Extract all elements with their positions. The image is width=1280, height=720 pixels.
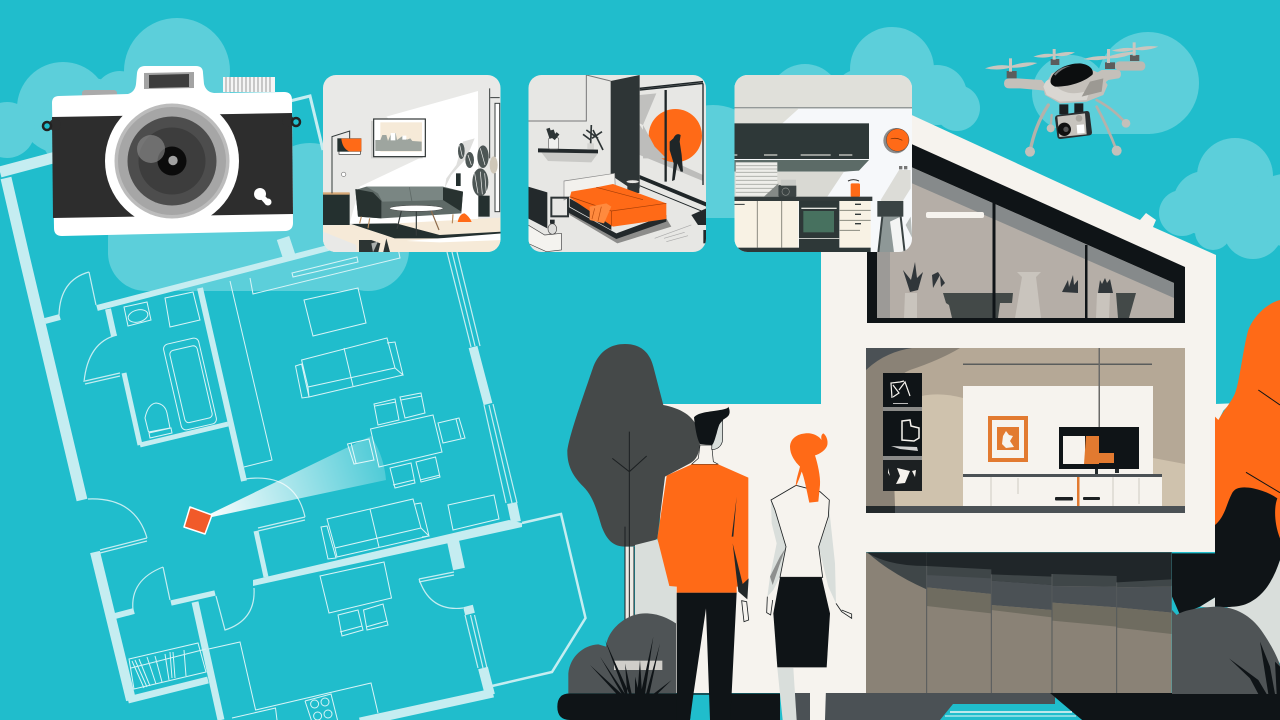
countertop bbox=[734, 197, 872, 201]
nightstands bbox=[551, 180, 639, 216]
tree trunk bbox=[612, 432, 647, 667]
man hand bbox=[742, 601, 749, 622]
floor plan walls bbox=[0, 96, 586, 720]
panel: right trees bbox=[1172, 300, 1280, 694]
tree backdrop bbox=[1200, 560, 1280, 663]
tree: black bbox=[1172, 487, 1280, 615]
house corner notch bbox=[1215, 403, 1231, 421]
stool bbox=[877, 201, 912, 252]
window frame bbox=[490, 88, 500, 158]
headboard bbox=[564, 173, 615, 200]
orange lamp bbox=[458, 213, 472, 222]
person: woman bbox=[767, 433, 852, 720]
ground bbox=[795, 693, 1280, 720]
floor plan windows and doors bbox=[59, 252, 517, 668]
camera leather band bbox=[52, 113, 293, 218]
wall panels bbox=[883, 373, 922, 491]
planter box bbox=[614, 661, 662, 670]
lower cabinets bbox=[734, 201, 871, 248]
drone motors bbox=[1007, 55, 1139, 78]
wall lines bbox=[528, 75, 611, 121]
clouds bbox=[0, 18, 1280, 291]
floor bbox=[323, 218, 503, 255]
dark plant bbox=[691, 208, 706, 225]
cloud: behind drone bbox=[1032, 32, 1199, 134]
bed duvet bbox=[570, 184, 666, 227]
woman arms bbox=[767, 500, 852, 618]
indoor plants bbox=[903, 262, 1113, 293]
indoor table bbox=[943, 293, 1013, 318]
man neck bbox=[692, 445, 718, 464]
shrubs: left bbox=[568, 613, 676, 693]
drone action camera bbox=[1055, 111, 1092, 139]
panel: left planting bbox=[557, 344, 852, 720]
icon: camera bbox=[43, 66, 300, 236]
wall socket bbox=[341, 172, 346, 176]
floor plan furniture bbox=[124, 243, 499, 720]
man pants bbox=[677, 593, 737, 720]
drone body bbox=[1043, 63, 1108, 103]
vase bbox=[548, 220, 557, 234]
cloud: between photos bbox=[660, 105, 766, 218]
wall light bbox=[881, 170, 911, 215]
drone propellers bbox=[985, 42, 1158, 72]
media console bbox=[528, 225, 561, 252]
garage bbox=[866, 552, 1172, 693]
indoor vase bbox=[1015, 272, 1041, 318]
tree backdrop bbox=[635, 539, 676, 623]
camera indicator bbox=[254, 188, 272, 206]
man face bbox=[712, 420, 723, 449]
indoor pots bbox=[904, 293, 917, 318]
drone arms bbox=[1004, 61, 1145, 92]
man hair bbox=[694, 407, 730, 445]
oven bbox=[799, 201, 839, 248]
side table bbox=[323, 193, 350, 225]
tree: orange bbox=[1215, 300, 1280, 538]
sofa bbox=[355, 187, 463, 228]
planter base bbox=[557, 693, 780, 720]
television bbox=[1059, 427, 1139, 474]
panel: kitchen photo bbox=[734, 75, 914, 255]
woman in window bbox=[670, 134, 683, 181]
floor plan bbox=[0, 96, 586, 720]
cloud: behind camera bbox=[0, 18, 230, 178]
panel: house bbox=[323, 42, 1280, 720]
person: man bbox=[657, 407, 749, 720]
television bbox=[528, 187, 547, 228]
sunlight bbox=[350, 91, 478, 223]
middle window bbox=[866, 348, 1185, 513]
plants bbox=[456, 143, 498, 217]
camera lens bbox=[105, 94, 239, 230]
curtain bbox=[611, 75, 640, 188]
plant shadow bbox=[445, 138, 475, 188]
wall picture bbox=[988, 416, 1028, 462]
woman top bbox=[771, 485, 829, 577]
drone legs bbox=[1030, 100, 1126, 152]
backsplash bbox=[734, 172, 844, 197]
cloud: behind roof bbox=[769, 27, 980, 145]
shelf bbox=[538, 125, 603, 162]
bed frame bbox=[568, 210, 671, 243]
man jacket bbox=[657, 464, 748, 593]
tree branch lines bbox=[1246, 390, 1280, 493]
floor light band bbox=[406, 233, 503, 242]
cloud: behind first photo bbox=[108, 143, 409, 291]
house body bbox=[660, 105, 1216, 693]
woman hair bbox=[790, 433, 828, 503]
floor lamp bbox=[332, 131, 361, 193]
rug shadow bbox=[351, 223, 503, 238]
camera viewfinder bbox=[144, 72, 194, 89]
wall art bbox=[371, 119, 425, 158]
camera body bbox=[52, 66, 293, 236]
upper cabinets bbox=[734, 123, 869, 159]
drone canopy bbox=[1051, 63, 1093, 87]
panel: living room photo bbox=[323, 75, 503, 255]
woman skirt bbox=[773, 577, 830, 667]
camera top dial bbox=[223, 77, 275, 92]
wall clock bbox=[883, 128, 909, 153]
shoes bbox=[359, 238, 390, 252]
tree: dark left bbox=[567, 344, 700, 547]
camera strap lugs bbox=[43, 115, 300, 131]
shrub: right bbox=[1172, 607, 1280, 694]
icon: drone bbox=[985, 42, 1158, 157]
grass: left bbox=[590, 637, 672, 694]
grass: right bbox=[1229, 642, 1280, 694]
top window bbox=[867, 124, 1185, 323]
camera shutter button bbox=[82, 90, 117, 99]
camera view cone bbox=[210, 436, 386, 517]
man sleeve shadow bbox=[732, 497, 749, 599]
drone camera mount bbox=[1059, 103, 1083, 114]
orange bottle bbox=[851, 183, 860, 197]
coffee machine bbox=[764, 180, 796, 197]
panel: bedroom photo bbox=[528, 75, 708, 255]
coffee table bbox=[390, 205, 443, 236]
window view bbox=[640, 82, 706, 212]
floor corner bbox=[323, 232, 356, 252]
floor marks bbox=[655, 225, 691, 242]
cloud: lower right bbox=[1159, 138, 1280, 259]
hood shadow bbox=[734, 160, 869, 172]
camera position marker bbox=[184, 507, 212, 534]
woman legs bbox=[777, 668, 797, 720]
gap between planter and legs bbox=[690, 695, 711, 720]
